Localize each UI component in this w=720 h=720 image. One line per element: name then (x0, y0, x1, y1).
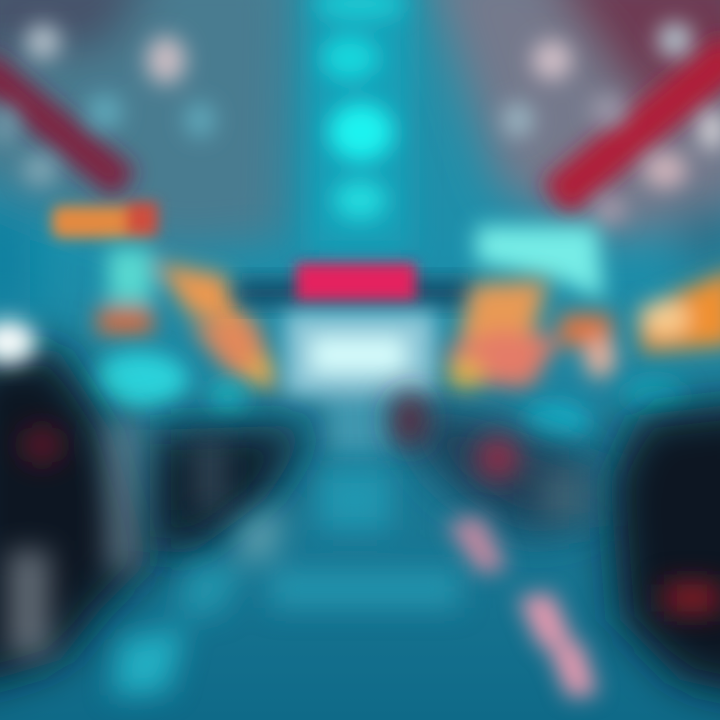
car: rear right (395, 410, 590, 535)
dark band behind sign (235, 280, 475, 306)
white glowing entrance (285, 312, 435, 452)
right orange signs cluster (442, 280, 616, 391)
left cars (0, 345, 315, 690)
left white light (0, 320, 36, 364)
red diagonal beam left (0, 65, 125, 185)
left orange signs cluster (97, 248, 280, 390)
pink central sign (296, 263, 416, 301)
right cyan light panel (476, 226, 604, 300)
floor pink dashes (446, 516, 598, 698)
far right orange sign (638, 268, 720, 352)
car: large right (610, 400, 720, 700)
left car highlights (8, 420, 225, 655)
cyan ceiling lights (316, 0, 404, 220)
floor left dashes (112, 470, 460, 696)
right car tail lights (392, 392, 720, 612)
ceiling light spots (0, 22, 720, 224)
central ceiling glow (310, 0, 410, 250)
right cars (395, 400, 720, 700)
left orange sign (52, 202, 158, 238)
ceiling side panels (0, 0, 720, 315)
cyan lower lights (92, 352, 687, 442)
car: large left (0, 345, 150, 690)
red diagonal beam right (555, 50, 720, 200)
car: rear left (150, 425, 315, 555)
